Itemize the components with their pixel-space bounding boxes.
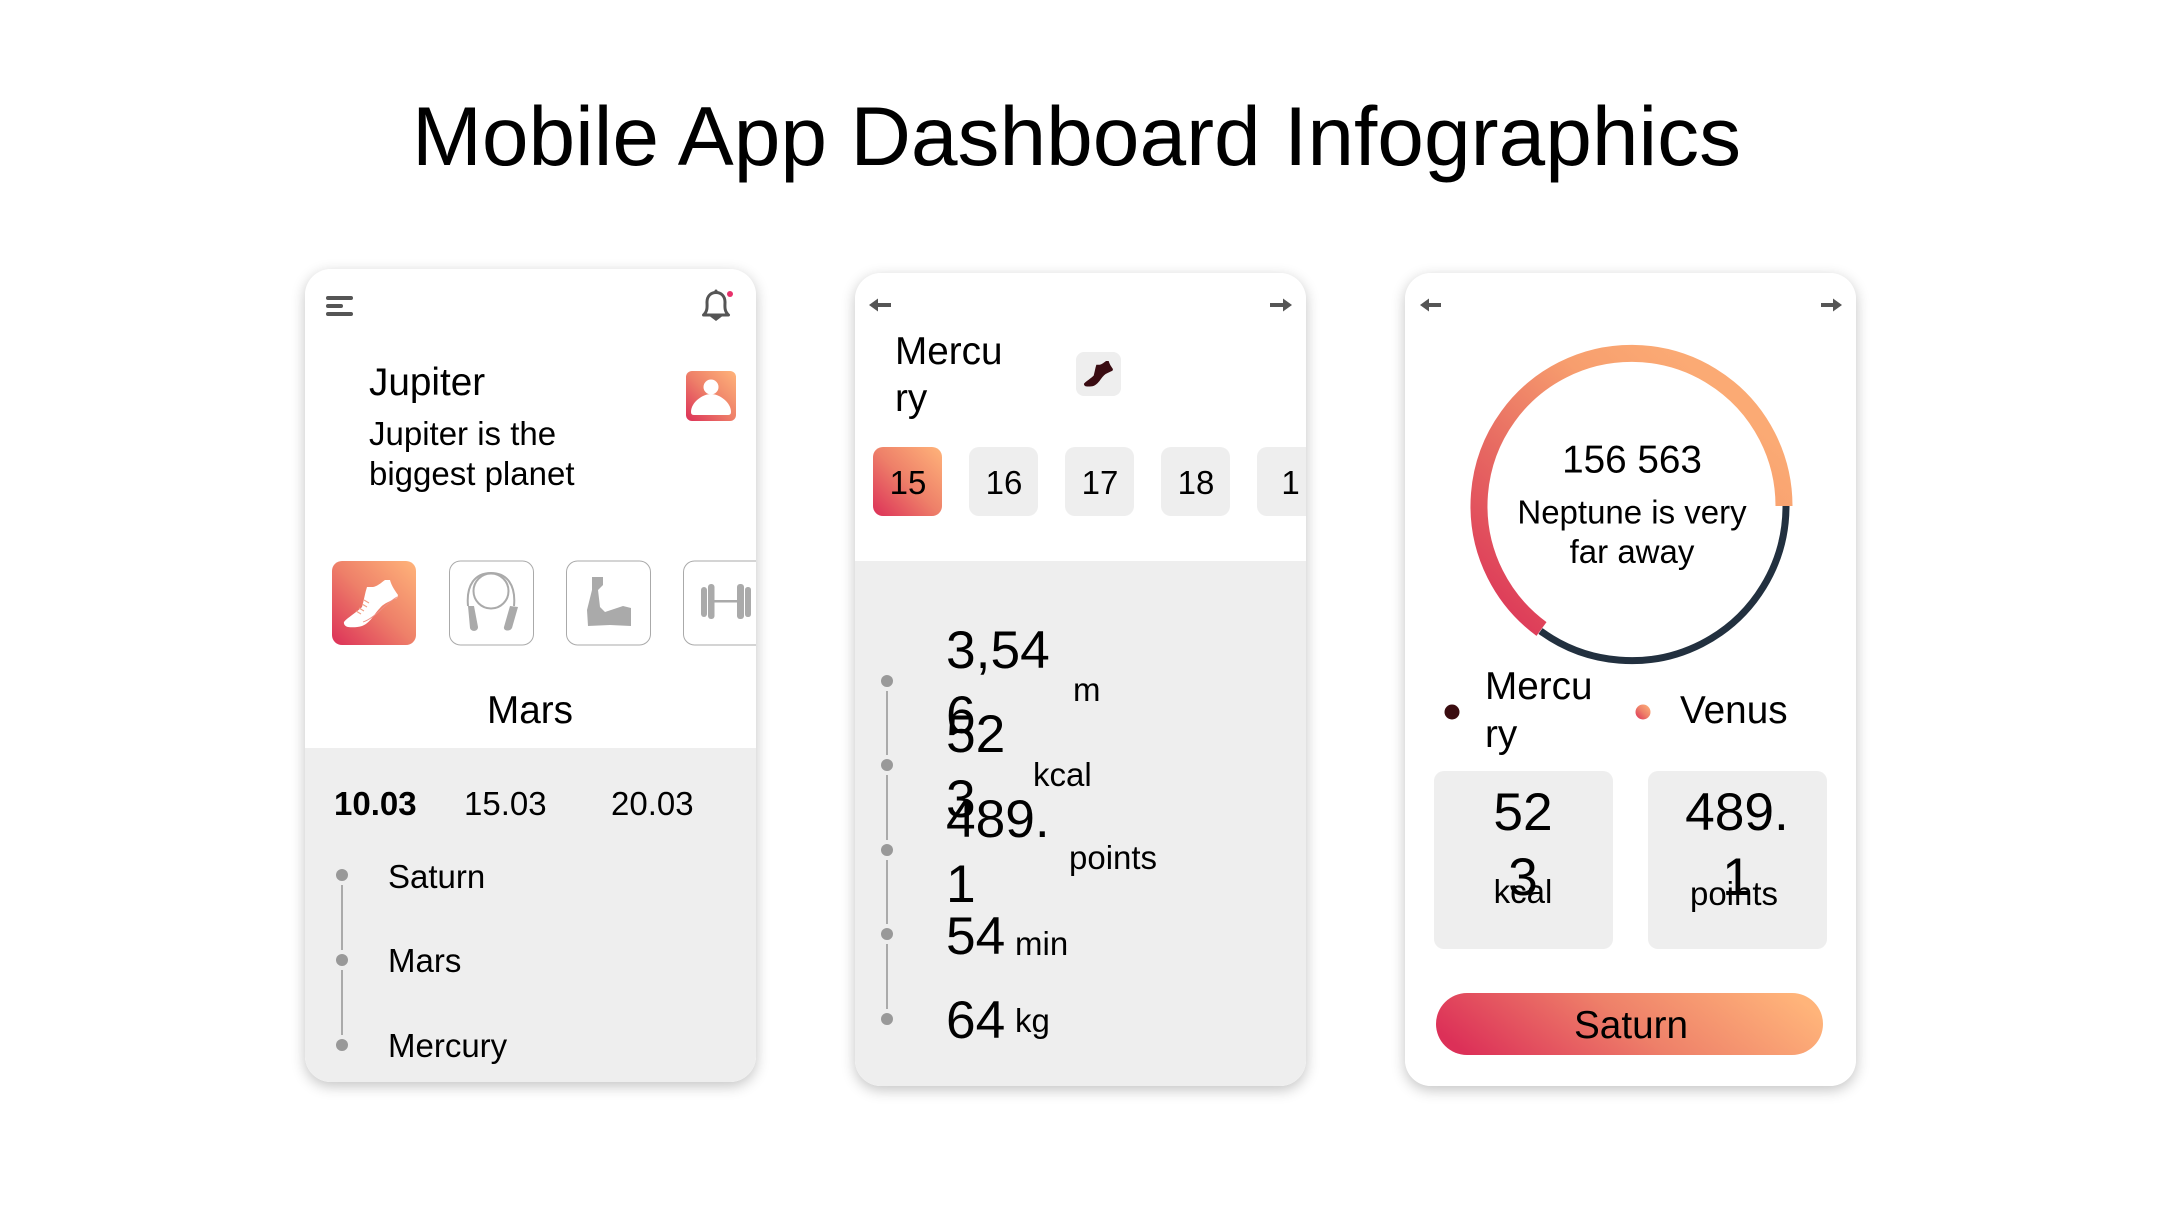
- button: Saturn: [1436, 993, 1823, 1055]
- dates row: 15.03: [464, 785, 547, 822]
- legend: Venus: Venus: [1680, 689, 1788, 732]
- text: Jupiter description: Jupiter is the: [369, 415, 556, 452]
- day selector: 15: [890, 464, 926, 501]
- title: Mobile App Dashboard Infographics: [412, 89, 1741, 183]
- day selector: [873, 447, 1326, 516]
- stat: points: [946, 790, 1157, 914]
- stat card: points: 1: [1722, 848, 1752, 907]
- donut value: 156 563: [1562, 438, 1702, 482]
- donut caption: [1517, 494, 1747, 570]
- donut chart: [1479, 353, 1786, 661]
- icon: notification bell: [704, 290, 733, 320]
- day selector: 1: [1281, 464, 1300, 501]
- icon: back arrow: [1420, 298, 1441, 312]
- legend: Mercury: Mercu: [1485, 665, 1592, 708]
- donut caption: Neptune is very: [1517, 494, 1747, 530]
- stat: time: 54: [946, 907, 1005, 966]
- stat card: points: points: [1690, 875, 1778, 912]
- timeline list: Mars: [388, 942, 461, 979]
- icon: profile avatar: [686, 371, 736, 421]
- stat card: kcal: 52: [1493, 783, 1553, 842]
- stat card: kcal: 3: [1508, 848, 1538, 907]
- timeline list: Saturn: [388, 858, 485, 895]
- stat: time: min: [1015, 925, 1068, 962]
- panel: Jupiter profile screen: [305, 269, 756, 1082]
- stat: points: points: [1069, 839, 1157, 876]
- timeline list: Mercury: [388, 1027, 508, 1064]
- stat: weight: 64: [946, 991, 1005, 1050]
- dates row: 20.03: [611, 785, 694, 822]
- legend: Mercury: [1444, 665, 1592, 756]
- stat: distance: 3,54: [946, 621, 1050, 680]
- timeline dots: [881, 675, 893, 1025]
- icon: forward arrow: [1270, 298, 1292, 312]
- stat: calories: 3: [946, 770, 976, 829]
- text: Jupiter description: biggest planet: [369, 455, 574, 492]
- icon: back arrow: [869, 298, 891, 312]
- panel: Mercury stats screen: [855, 273, 1306, 1086]
- stat: points: 1: [946, 855, 976, 914]
- heading: Mercury: Mercu: [895, 330, 1002, 373]
- dates row: 10.03: [334, 785, 417, 822]
- heading: Jupiter: Jupiter: [369, 361, 485, 404]
- stat card: points: 489.: [1685, 783, 1789, 842]
- stat card: kcal: kcal: [1494, 873, 1552, 910]
- icon: running shoe active tile: [332, 561, 416, 645]
- icon: dumbbell tile: [684, 561, 768, 645]
- stat: calories: kcal: [1033, 756, 1092, 793]
- stat card: points: [1648, 771, 1827, 949]
- icon: muscle arm tile: [566, 561, 650, 645]
- day selector: 17: [1082, 464, 1118, 501]
- stat: distance: [946, 621, 1100, 745]
- text: Jupiter description: [369, 415, 574, 492]
- day selector: 16: [986, 464, 1022, 501]
- stat: calories: 52: [946, 705, 1005, 764]
- panel: Neptune progress screen: [1405, 273, 1856, 1086]
- stat: distance: 6: [946, 686, 976, 745]
- stat: points: 489.: [946, 790, 1050, 849]
- dates row: [334, 785, 694, 822]
- heading: Mars: Mars: [487, 689, 573, 732]
- icon: jump rope tile: [450, 561, 534, 645]
- stat card: kcal: [1434, 771, 1613, 949]
- timeline list: [336, 858, 508, 1064]
- legend: Mercury: ry: [1485, 713, 1518, 756]
- day selector: 18: [1178, 464, 1214, 501]
- stat: distance: m: [1073, 671, 1100, 708]
- stat: weight: [946, 991, 1050, 1050]
- icon: shoe tile: [1076, 352, 1121, 396]
- icon: forward arrow: [1821, 298, 1842, 312]
- button: Saturn: Saturn: [1574, 1004, 1688, 1047]
- heading: Mercury: ry: [895, 377, 928, 420]
- stat: calories: [946, 705, 1092, 829]
- icon: menu: [326, 296, 353, 316]
- donut caption: far away: [1570, 533, 1695, 570]
- stat: weight: kg: [1015, 1002, 1050, 1039]
- heading: Mercury: [895, 330, 1002, 420]
- stat: time: [946, 907, 1068, 966]
